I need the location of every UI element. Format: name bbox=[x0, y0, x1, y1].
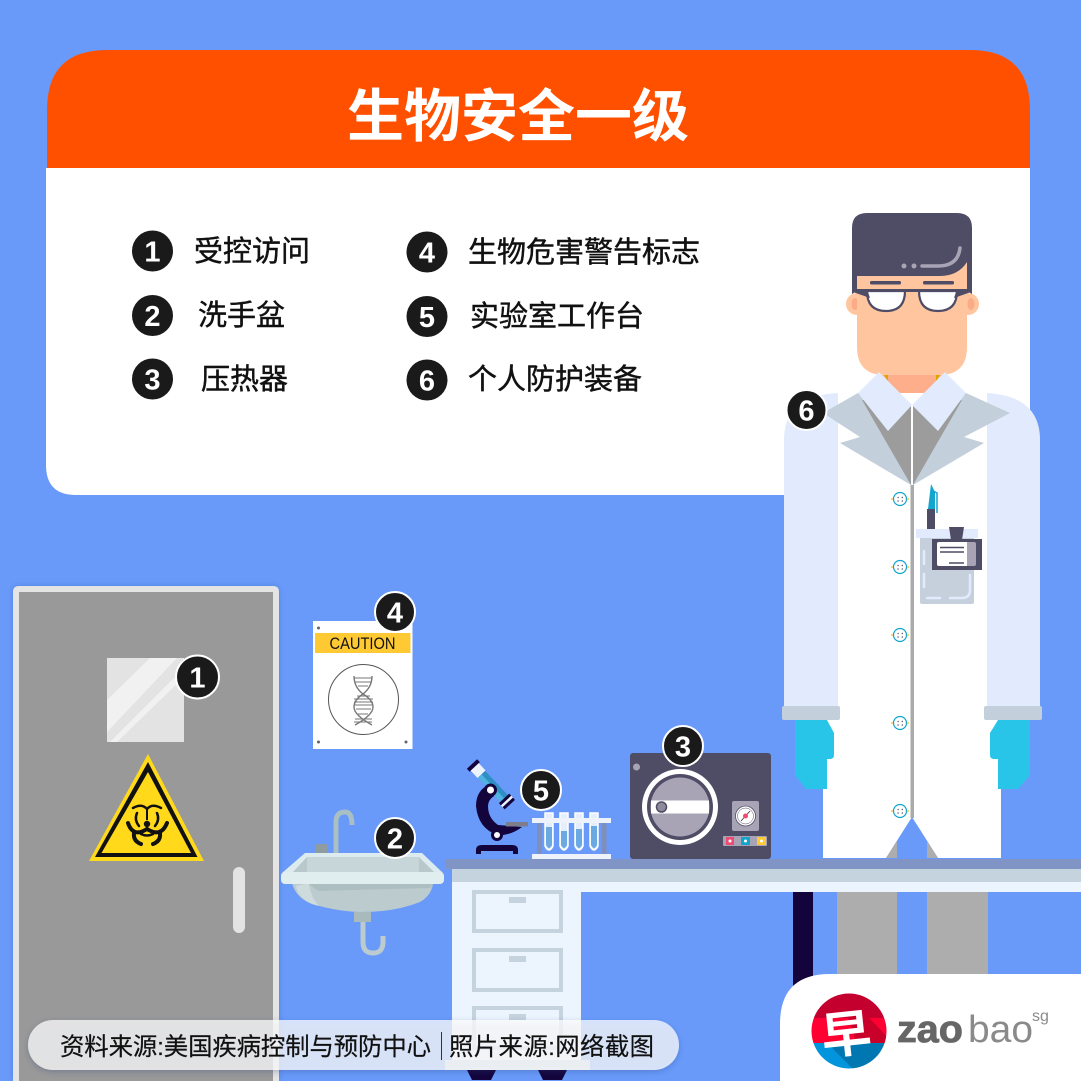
marker 5: 5 bbox=[533, 776, 549, 808]
source note: 资料来源:美国疾病控制与预防中心 bbox=[60, 1034, 431, 1061]
marker 6 bbox=[786, 390, 826, 430]
source note bbox=[28, 1020, 679, 1070]
legend item 1: 1 bbox=[144, 236, 161, 268]
zaobao logo: bao bbox=[968, 1009, 1033, 1051]
marker 4: 4 bbox=[387, 598, 403, 630]
legend item 5 bbox=[406, 296, 644, 337]
legend item 2 bbox=[132, 295, 285, 336]
microscope bbox=[467, 759, 528, 854]
zaobao logo: sg bbox=[1032, 1008, 1049, 1025]
caution poster: CAUTION bbox=[330, 634, 396, 653]
pocket bbox=[916, 529, 978, 604]
eyebrows bbox=[870, 281, 901, 284]
drain pipe bbox=[354, 912, 371, 922]
legs bbox=[837, 892, 897, 982]
marker 6: 6 bbox=[798, 396, 815, 428]
legend item 4 bbox=[406, 232, 700, 272]
control buttons bbox=[723, 836, 767, 846]
glasses bbox=[853, 289, 971, 311]
marker 3 bbox=[663, 726, 703, 766]
test tube rack bbox=[532, 813, 611, 859]
cuffs bbox=[782, 706, 840, 720]
legend item 5: 实验室工作台 bbox=[470, 300, 644, 333]
title: 生物安全一级 bbox=[347, 85, 689, 149]
marker 5 bbox=[521, 770, 561, 810]
face bbox=[857, 260, 967, 375]
legend item 2: 2 bbox=[144, 301, 161, 333]
marker 1 bbox=[176, 656, 219, 698]
coat zipper bbox=[910, 485, 914, 818]
legend item 3: 压热器 bbox=[201, 363, 288, 396]
door handle bbox=[233, 867, 245, 933]
pen bbox=[927, 484, 937, 529]
legend item 3: 3 bbox=[144, 364, 161, 396]
zaobao logo bbox=[780, 974, 1081, 1081]
lab bench bbox=[445, 859, 1081, 1080]
coat buttons bbox=[891, 492, 909, 818]
faucet bbox=[336, 812, 352, 853]
ID badge bbox=[932, 527, 982, 570]
scientist bbox=[782, 213, 1042, 982]
DNA icon bbox=[354, 676, 373, 725]
marker 2 bbox=[375, 818, 415, 858]
hair bbox=[852, 213, 972, 294]
title banner bbox=[47, 50, 1030, 168]
marker 4 bbox=[375, 592, 415, 632]
legend item 4: 4 bbox=[419, 238, 435, 270]
legend item 5: 5 bbox=[419, 302, 435, 334]
ears bbox=[846, 293, 868, 315]
legend item 6 bbox=[406, 360, 642, 400]
logo badge: 早 bbox=[819, 1005, 874, 1065]
legend item 2: 洗手盆 bbox=[198, 299, 285, 332]
gloves bbox=[795, 720, 834, 789]
legend item 6: 个人防护装备 bbox=[468, 363, 642, 396]
sleeves bbox=[784, 393, 838, 706]
marker 3: 3 bbox=[675, 732, 691, 764]
pressure gauge bbox=[732, 801, 759, 831]
neck bbox=[880, 375, 945, 406]
legend item 3 bbox=[132, 358, 288, 400]
sink bbox=[281, 812, 444, 953]
marker 1: 1 bbox=[189, 662, 206, 694]
zaobao logo: zao bbox=[897, 1009, 963, 1051]
marker 2: 2 bbox=[387, 824, 403, 856]
collar bbox=[858, 372, 912, 431]
door bbox=[13, 586, 279, 1081]
legend item 6: 6 bbox=[419, 366, 435, 398]
legend item 1: 受控访问 bbox=[194, 235, 310, 268]
shirt bbox=[862, 400, 962, 485]
lapels bbox=[823, 393, 912, 485]
legend item 1 bbox=[132, 230, 310, 272]
biohazard warning sign bbox=[89, 754, 204, 861]
lab coat body bbox=[823, 393, 1001, 858]
caution poster bbox=[313, 621, 412, 749]
logo badge bbox=[811, 993, 890, 1069]
panel: legend card bbox=[46, 50, 1030, 495]
drawer unit bbox=[445, 892, 590, 1080]
door window bbox=[107, 658, 184, 742]
legend item 4: 生物危害警告标志 bbox=[468, 236, 700, 269]
autoclave bbox=[630, 753, 771, 859]
source note: 照片来源:网络截图 bbox=[449, 1034, 654, 1061]
